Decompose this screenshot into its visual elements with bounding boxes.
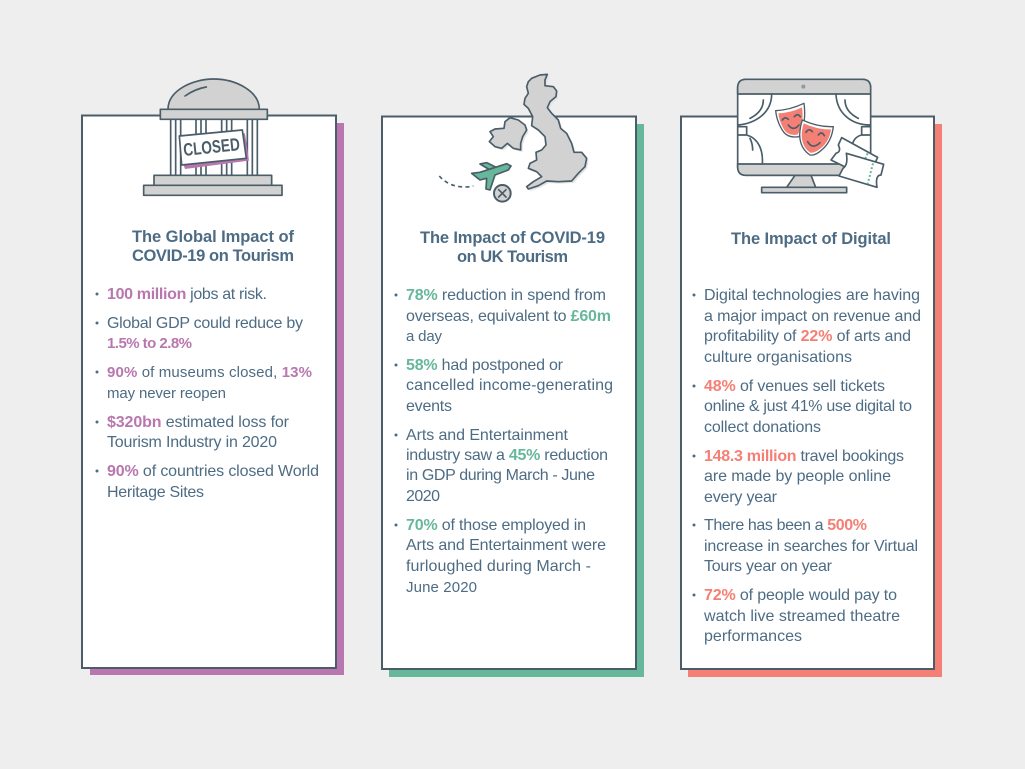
bullet list: 90% of museums closed, 13% (107, 364, 312, 381)
bullet list: There has been a 500% (704, 517, 867, 534)
panel: UK impact (382, 74, 644, 677)
bullet list: a major impact on revenue and (704, 308, 921, 325)
bullet list: 1.5% to 2.8% (107, 335, 192, 352)
bullet list: 2020 (406, 488, 440, 505)
bullet list: every year (704, 489, 778, 506)
bullet list: 90% of countries closed World (107, 463, 319, 480)
bullet list: online & just 41% use digital to (704, 398, 912, 415)
icon: closed museum (144, 79, 282, 195)
bullet list: 58% had postponed or (406, 357, 564, 374)
icon: monitor with theatre masks and tickets (738, 79, 884, 193)
heading: COVID-19 on Tourism (132, 247, 294, 265)
bullet list: culture organisations (704, 349, 852, 366)
bullet list: 148.3 million travel bookings (704, 448, 904, 465)
bullet list: 100 million jobs at risk. (107, 286, 267, 303)
heading (132, 228, 294, 265)
bullet list: 70% of those employed in (406, 517, 586, 534)
heading: on UK Tourism (457, 248, 568, 266)
bullet list: June 2020 (406, 579, 477, 596)
bullet list: events (406, 398, 452, 415)
panel: global impact (82, 79, 344, 675)
bullet list: Heritage Sites (107, 484, 204, 501)
bullet list: increase in searches for Virtual (704, 538, 918, 555)
bullet list (96, 286, 319, 501)
bullet list: $320bn estimated loss for (107, 414, 290, 431)
bullet list: cancelled income-generating (406, 377, 613, 394)
bullet list: in GDP during March - June (406, 467, 595, 484)
panel: digital impact (681, 79, 942, 677)
bullet list: performances (704, 628, 802, 645)
bullet list (394, 287, 613, 596)
bullet list: watch live streamed theatre (703, 608, 900, 625)
bullet list: Arts and Entertainment were (406, 537, 606, 554)
heading: The Impact of COVID-19 (420, 229, 605, 247)
bullet list: 78% reduction in spend from (406, 287, 606, 304)
bullet list: Global GDP could reduce by (107, 315, 303, 332)
bullet list: profitability of 22% of arts and (704, 328, 911, 345)
bullet list: Arts and Entertainment (406, 427, 569, 444)
bullet list: Digital technologies are having (704, 287, 920, 304)
bullet list: a day (406, 328, 442, 345)
bullet list: industry saw a 45% reduction (406, 447, 608, 464)
bullet list: may never reopen (107, 385, 226, 402)
heading: The Impact of Digital (731, 230, 891, 248)
bullet list: overseas, equivalent to £60m (406, 308, 611, 325)
bullet list: Tourism Industry in 2020 (107, 434, 277, 451)
icon: closed museum: CLOSED (182, 134, 241, 160)
bullet list: collect donations (704, 419, 821, 436)
icon: UK map and plane (439, 74, 589, 202)
bullet list: are made by people online (704, 468, 891, 485)
bullet list: 72% of people would pay to (704, 587, 897, 604)
bullet list: 48% of venues sell tickets (704, 378, 885, 395)
heading: The Global Impact of (132, 228, 294, 246)
bullet list (692, 287, 921, 645)
bullet list: Tours year on year (704, 558, 833, 575)
heading (420, 229, 605, 266)
bullet list: furloughed during March - (406, 558, 591, 575)
